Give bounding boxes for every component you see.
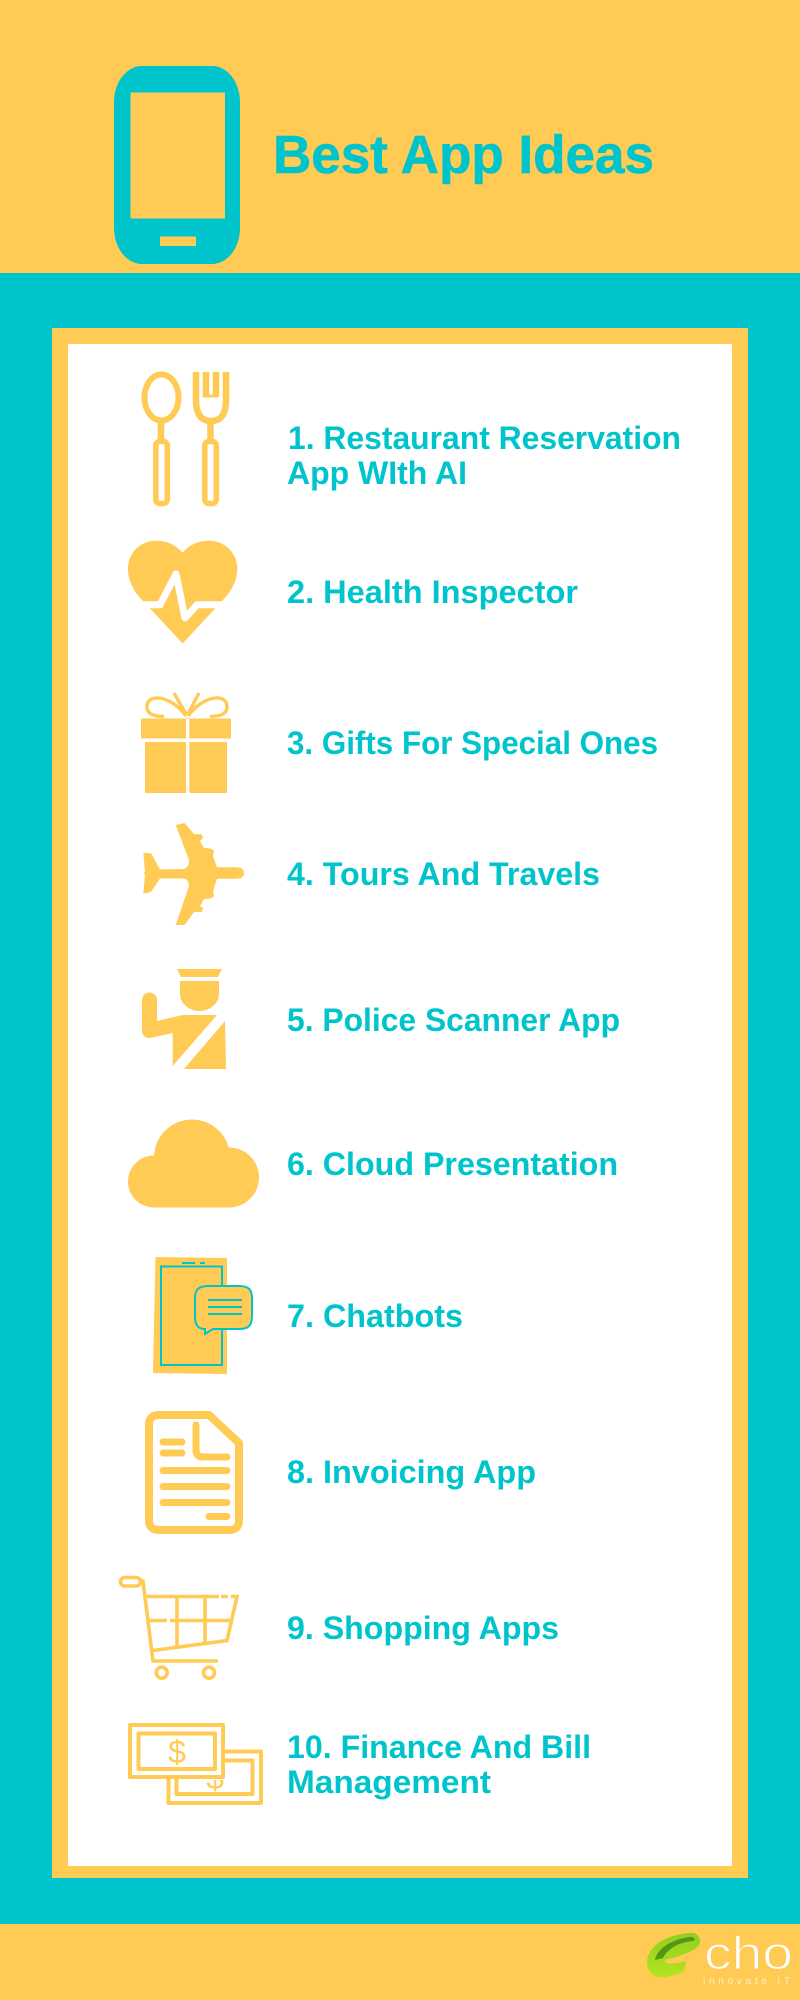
icon: banknotes: $ bbox=[206, 1760, 224, 1796]
title: Best App Ideas bbox=[273, 125, 654, 185]
logo: echo innovate IT bbox=[647, 1927, 793, 1987]
logo wordmark: cho bbox=[704, 1927, 793, 1979]
panel: white list area bbox=[68, 344, 732, 1866]
item 6 text: 6. Cloud Presentation bbox=[287, 1146, 618, 1182]
logo tagline: innovate IT bbox=[703, 1976, 790, 1987]
icon: invoice document bbox=[149, 1415, 239, 1530]
item 1 text: App WIth AI bbox=[287, 455, 467, 491]
item 1 text: 1. Restaurant Reservation bbox=[288, 420, 681, 456]
item 10 text: Management bbox=[287, 1764, 491, 1800]
icon: spoon and fork bbox=[144, 372, 226, 504]
icon: gift box bbox=[141, 693, 231, 793]
item 4 text: 4. Tours And Travels bbox=[287, 856, 600, 892]
item 1 text bbox=[287, 420, 681, 491]
icon: phone with chat bubble bbox=[153, 1257, 252, 1374]
icon: airplane bbox=[143, 823, 244, 925]
logo mark: green e bbox=[647, 1933, 700, 1977]
panel: header band bbox=[0, 0, 800, 273]
item 5 text: 5. Police Scanner App bbox=[287, 1002, 620, 1038]
item 7 text: 7. Chatbots bbox=[287, 1298, 463, 1334]
icon: heart with pulse bbox=[126, 541, 239, 644]
icon: cloud bbox=[128, 1120, 259, 1208]
icon: banknotes: $ bbox=[168, 1734, 186, 1770]
icon: smartphone bbox=[114, 66, 240, 264]
panel: footer band bbox=[0, 1924, 800, 2000]
icon: police officer bbox=[142, 969, 226, 1069]
item 10 text: 10. Finance And Bill bbox=[287, 1729, 591, 1765]
item 2 text: 2. Health Inspector bbox=[287, 574, 578, 610]
item 9 text: 9. Shopping Apps bbox=[287, 1610, 559, 1646]
icon: banknotes bbox=[130, 1725, 261, 1803]
item 8 text: 8. Invoicing App bbox=[287, 1454, 536, 1490]
item 3 text: 3. Gifts For Special Ones bbox=[287, 725, 658, 761]
item 10 text bbox=[287, 1729, 591, 1800]
icon: shopping cart bbox=[120, 1578, 237, 1678]
panel: yellow list frame bbox=[52, 328, 748, 1878]
